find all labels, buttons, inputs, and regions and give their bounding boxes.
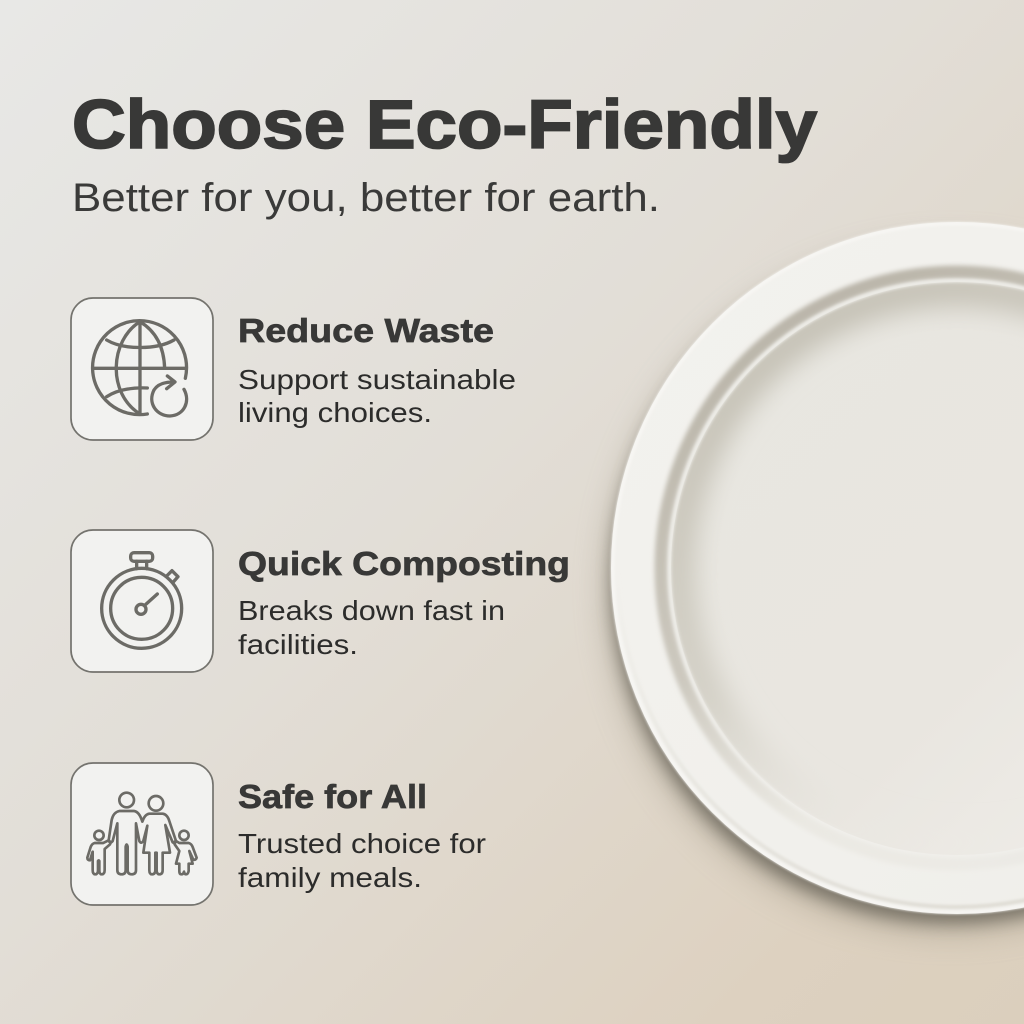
plate inner shading [671,282,1024,768]
plate soft outer shadow [607,245,1024,931]
heading: reduce waste: Reduce Waste [238,312,494,349]
text: quick composting description [238,595,505,660]
text: quick composting description: facilities. [238,629,358,660]
panel: safe for all [71,763,486,905]
subtitle: Better for you, better for earth. [72,176,660,220]
heading: safe for all: Safe for All [238,778,427,815]
title: Choose Eco-Friendly [72,86,817,163]
plate highlight ring [670,281,1024,855]
text: reduce waste description [238,364,516,428]
text: reduce waste description: Support sustainable [238,364,516,395]
text: quick composting description: Breaks down fast in [238,595,505,626]
plate groove [661,272,1024,864]
icon: globe with refresh arrow [71,298,213,440]
panel: quick composting [71,530,570,672]
text: safe for all description: Trusted choice for [238,828,486,859]
plate lower lip [618,229,1024,907]
panel: reduce waste [71,298,516,440]
text: safe for all description: family meals. [238,862,422,893]
text: reduce waste description: living choices. [238,397,432,428]
icon: family [71,763,213,905]
plate drop shadow [612,241,1024,923]
text: safe for all description [238,828,486,893]
icon: stopwatch [71,530,213,672]
plate rim [611,222,1024,914]
plate rim edge [612,224,1024,912]
plate photo [607,222,1024,931]
heading: quick composting: Quick Composting [238,545,570,582]
plate well [670,281,1024,855]
